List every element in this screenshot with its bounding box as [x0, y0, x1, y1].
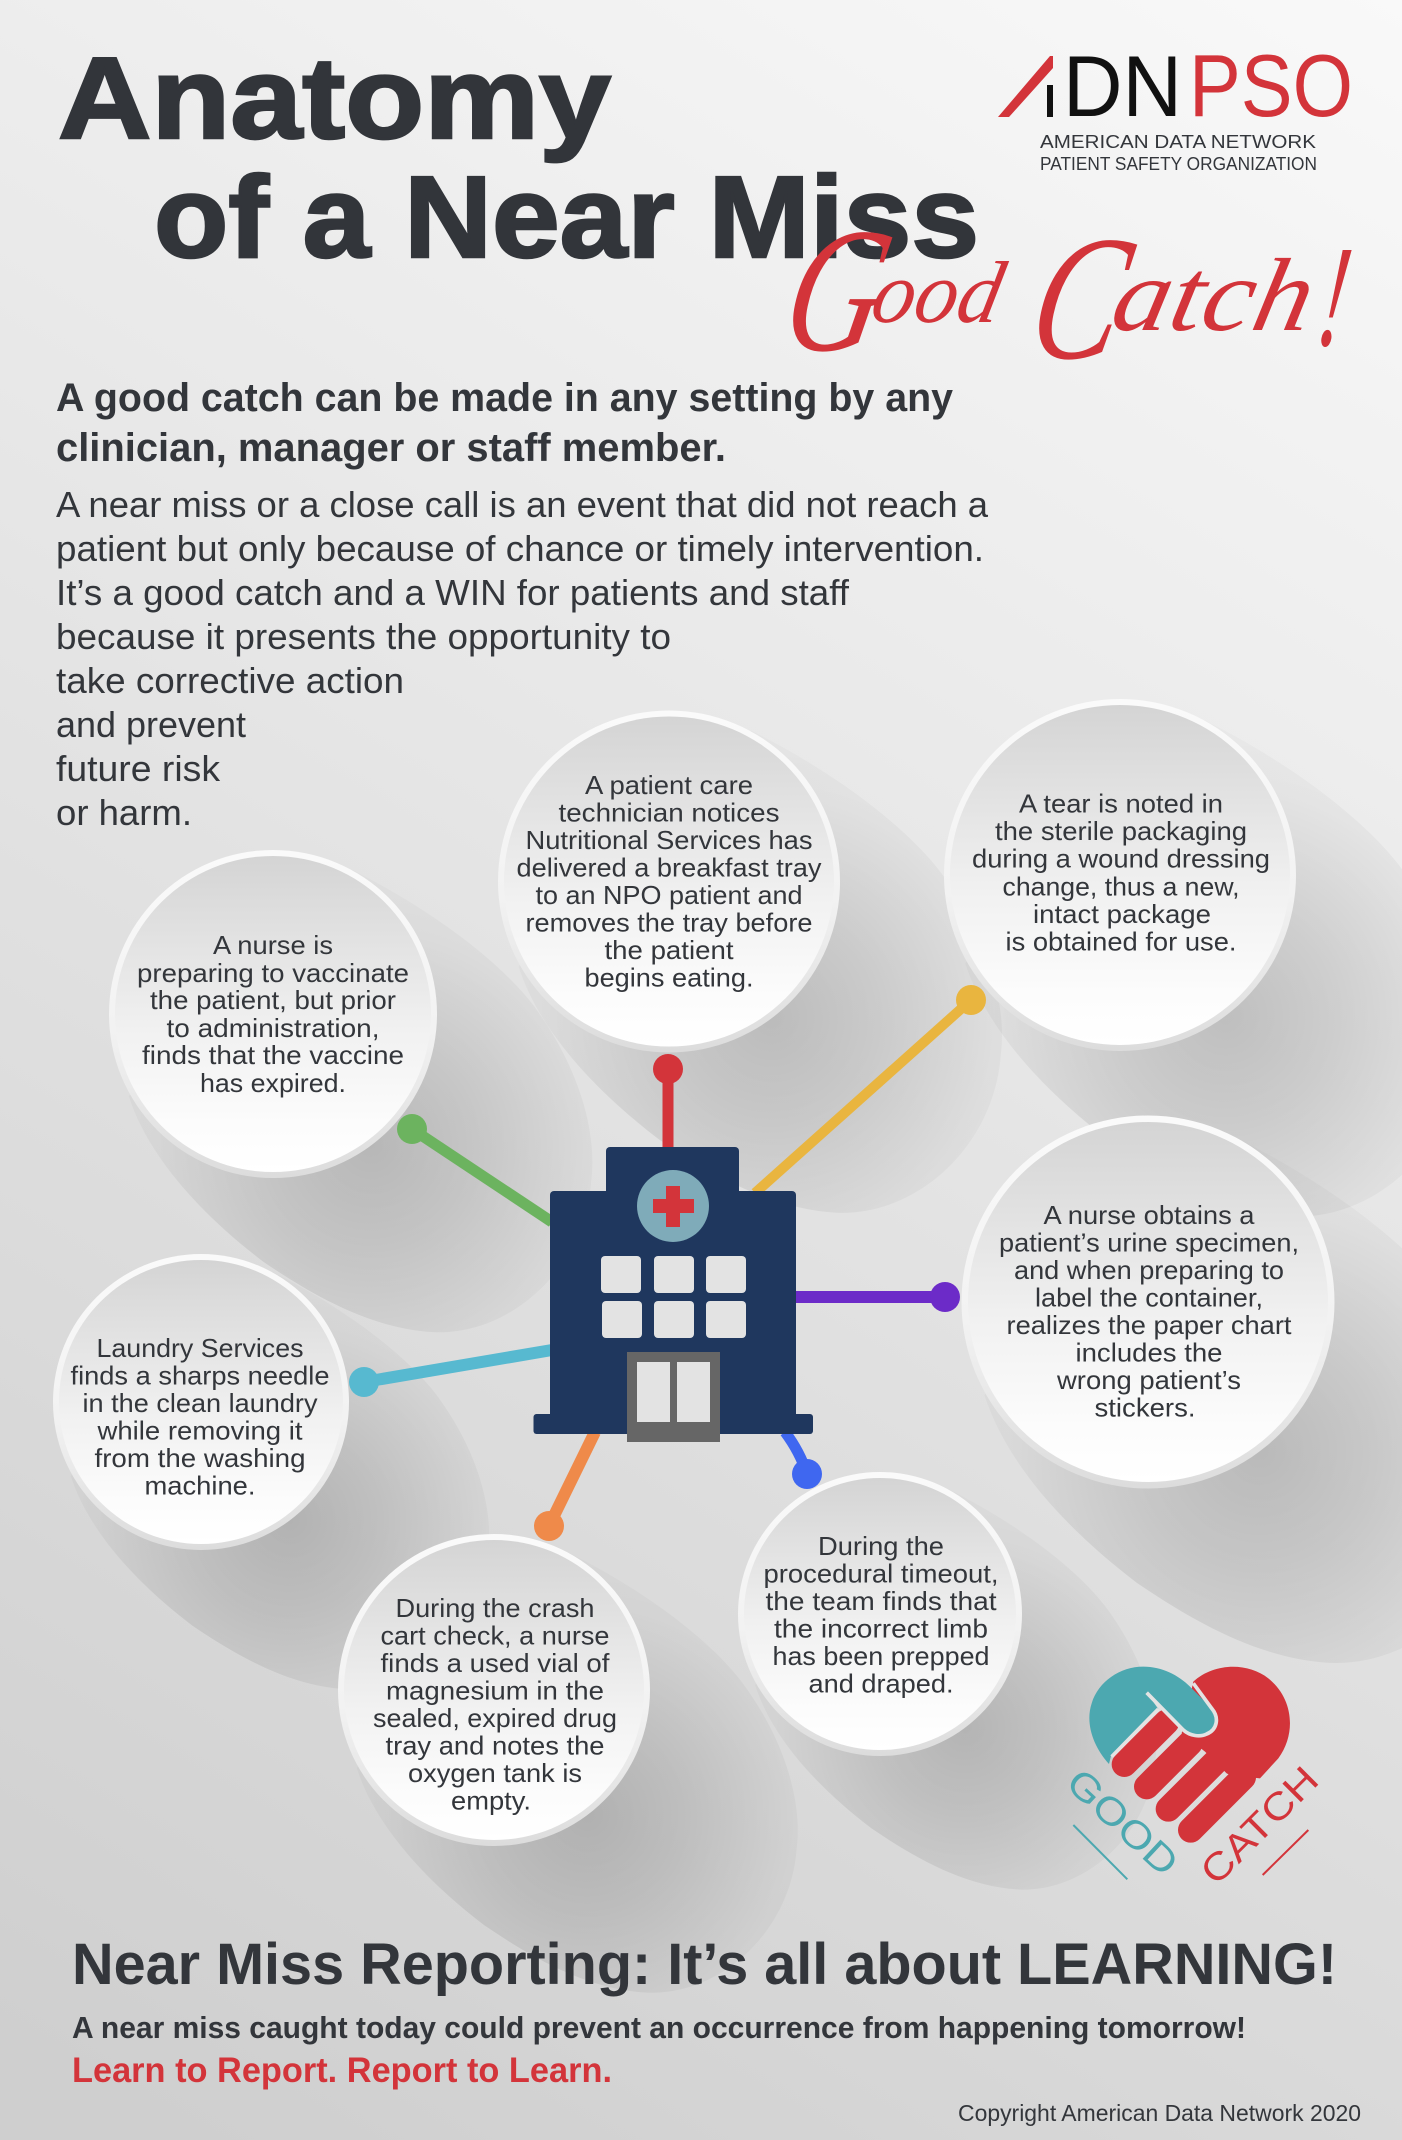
script heading: Good Catch!: C: [1016, 200, 1147, 397]
panel: urine specimen: realizes the paper chart: [1006, 1310, 1292, 1340]
script heading: Good Catch!: [770, 192, 1360, 397]
panel: vaccine: finds that the vaccine: [142, 1040, 404, 1070]
panel: crash cart: empty.: [451, 1786, 531, 1816]
panel: vaccine: to administration,: [166, 1013, 380, 1043]
panel: procedural timeout: procedural timeout,: [764, 1558, 998, 1588]
spoke: cyan: [349, 1350, 552, 1397]
panel: vaccine: A nurse is: [213, 930, 333, 960]
panel: breakfast tray: begins eating.: [584, 962, 754, 992]
panel: breakfast tray: Nutritional Services has: [526, 825, 812, 855]
panel: breakfast tray: delivered a breakfast tray: [516, 853, 822, 883]
panel: urine specimen: and when preparing to: [1014, 1255, 1284, 1285]
panel: procedural timeout: the team finds that: [766, 1586, 997, 1616]
panel: sterile packaging: A tear is noted in: [1019, 788, 1223, 818]
panel: urine specimen: includes the: [1076, 1338, 1222, 1368]
footer heading: Near Miss Reporting: It’s all about LEARNING!: [72, 1932, 1337, 1997]
panel: crash cart: cart check, a nurse: [380, 1620, 610, 1650]
panel: urine specimen: [962, 1116, 1334, 1488]
script heading: Good Catch!: G: [770, 192, 908, 389]
long circle shadows: [71, 720, 1402, 1993]
intro paragraph: patient but only because of chance or timely intervention.: [56, 528, 984, 569]
intro paragraph: or harm.: [56, 792, 192, 833]
intro paragraph: [56, 484, 989, 833]
panel: crash cart: oxygen tank is: [408, 1758, 582, 1788]
panel: sterile packaging: change, thus a new,: [1002, 871, 1240, 901]
panel: laundry: while removing it: [96, 1416, 303, 1446]
panel: sterile packaging: intact package: [1033, 899, 1211, 929]
copyright: Copyright American Data Network 2020: [958, 2100, 1361, 2126]
panel: crash cart: tray and notes the: [386, 1730, 604, 1760]
panel: sterile packaging: is obtained for use.: [1006, 926, 1236, 956]
panel: breakfast tray: to an NPO patient and: [536, 880, 802, 910]
panel: breakfast tray: removes the tray before: [526, 908, 812, 938]
panel: breakfast tray: technician notices: [558, 798, 780, 828]
subheading: A good catch can be made in any setting by any: [56, 376, 954, 420]
footer call to action: Learn to Report. Report to Learn.: [72, 2051, 612, 2090]
panel: laundry: [53, 1254, 349, 1550]
panel: procedural timeout: the incorrect limb: [774, 1614, 988, 1644]
title: [58, 33, 979, 282]
spoke: purple: [794, 1282, 960, 1312]
panel: procedural timeout: During the: [818, 1531, 944, 1561]
logo: good catch handshake: GOOD: [1058, 1761, 1186, 1885]
subheading: [56, 376, 954, 470]
logo: good catch handshake: CATCH: [1193, 1759, 1327, 1893]
logo: ADN PSO: PSO: [1189, 36, 1353, 135]
panel: urine specimen: A nurse obtains a: [1044, 1200, 1255, 1230]
panel: breakfast tray: [498, 710, 840, 1052]
panel: crash cart: [338, 1534, 650, 1846]
panel: sterile packaging: [944, 699, 1296, 1051]
panel: procedural timeout: [738, 1472, 1022, 1756]
panel: laundry: finds a sharps needle: [70, 1360, 330, 1390]
panel: vaccine: preparing to vaccinate: [137, 958, 409, 988]
icon: hospital: [534, 1147, 813, 1442]
panel: procedural timeout: and draped.: [808, 1668, 954, 1698]
panel: vaccine: has expired.: [200, 1068, 346, 1098]
script heading: Good Catch!: !: [1310, 216, 1360, 377]
panel: urine specimen: stickers.: [1094, 1392, 1196, 1422]
panel: crash cart: During the crash: [396, 1593, 594, 1623]
title: of a Near Miss: [154, 152, 979, 282]
panel: urine specimen: label the container,: [1035, 1282, 1263, 1312]
intro paragraph: and prevent: [56, 704, 246, 745]
panel: crash cart: magnesium in the: [386, 1676, 604, 1706]
panel: breakfast tray: the patient: [604, 935, 734, 965]
subheading: clinician, manager or staff member.: [56, 426, 726, 470]
intro paragraph: A near miss or a close call is an event that did not reach a: [56, 484, 989, 525]
script heading: Good Catch!: ood: [864, 245, 1013, 342]
intro paragraph: because it presents the opportunity to: [56, 616, 671, 657]
logo: ADN PSO: DN: [1063, 39, 1182, 135]
panel: laundry: machine.: [144, 1470, 256, 1500]
panel: laundry: Laundry Services: [96, 1333, 304, 1363]
intro paragraph: take corrective action: [56, 660, 404, 701]
footer message: A near miss caught today could prevent an occurrence from happening tomorrow!: [72, 2010, 1246, 2045]
logo: ADN PSO: PATIENT SAFETY ORGANIZATION: [1040, 154, 1317, 174]
panel: vaccine: the patient, but prior: [150, 985, 396, 1015]
panel: laundry: from the washing: [94, 1443, 306, 1473]
panel: crash cart: finds a used vial of: [380, 1648, 610, 1678]
logo: ADN PSO: [998, 36, 1353, 174]
spoke: orange: [534, 1432, 595, 1541]
intro paragraph: It’s a good catch and a WIN for patients and staff: [56, 572, 850, 613]
spoke: green: [397, 1114, 552, 1222]
panel: sterile packaging: the sterile packaging: [995, 816, 1247, 846]
panel: crash cart: sealed, expired drug: [373, 1703, 617, 1733]
logo: ADN PSO: AMERICAN DATA NETWORK: [1040, 132, 1316, 152]
spoke: red: [653, 1054, 683, 1150]
panel: breakfast tray: A patient care: [585, 770, 753, 800]
panel: urine specimen: wrong patient’s: [1056, 1365, 1241, 1395]
panel: laundry: in the clean laundry: [82, 1388, 318, 1418]
panel: vaccine: [109, 850, 437, 1178]
script heading: Good Catch!: atch: [1103, 237, 1326, 353]
spoke: yellow: [755, 985, 986, 1193]
spoke: blue: [785, 1432, 822, 1489]
title: Anatomy: [58, 33, 611, 163]
panel: urine specimen: patient’s urine specimen,: [999, 1228, 1299, 1258]
panel: procedural timeout: has been prepped: [772, 1641, 990, 1671]
panel: sterile packaging: during a wound dressing: [972, 844, 1270, 874]
logo: good catch handshake: [1058, 1667, 1327, 1893]
intro paragraph: future risk: [56, 748, 221, 789]
